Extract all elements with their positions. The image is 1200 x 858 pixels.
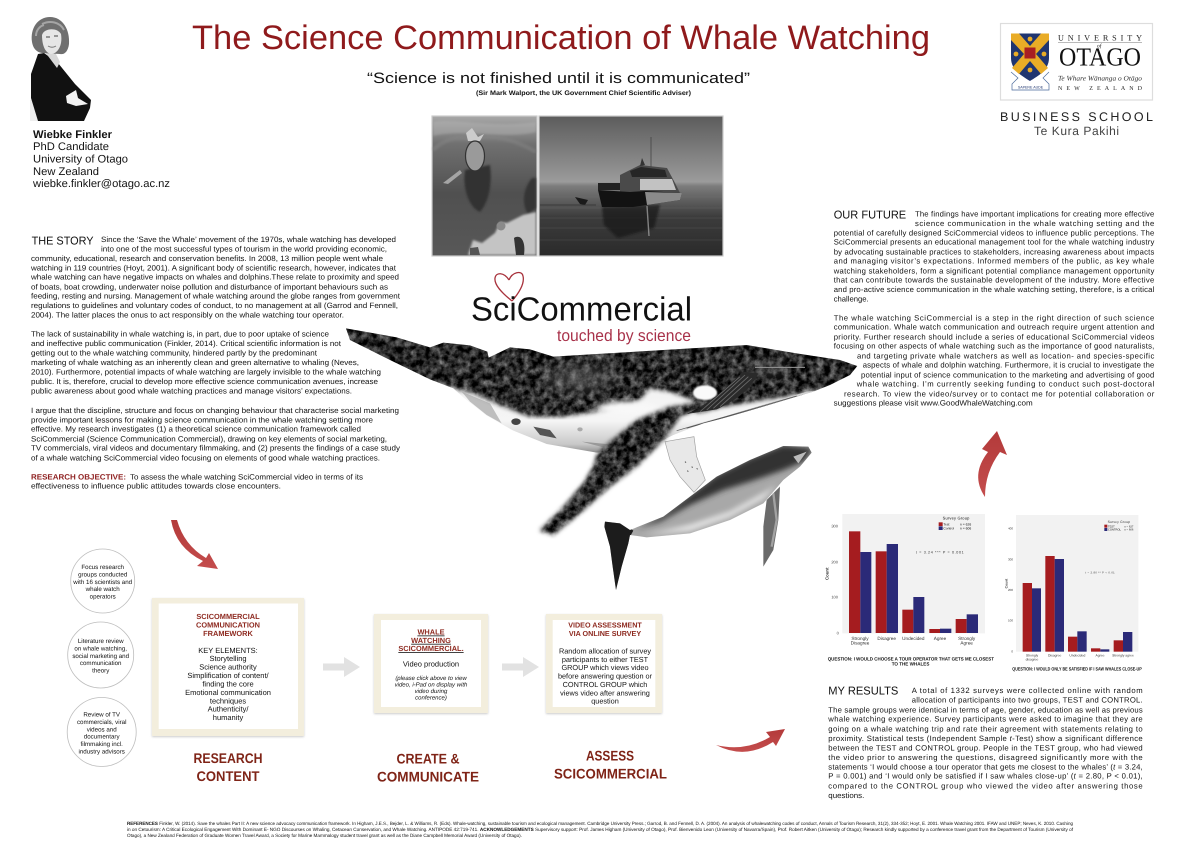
section: my results: compared to the CONTROL group who viewed the video after answering those [828,781,1143,790]
box: video assessment: GROUP which views video [561,663,649,672]
circle: focus groups: groups conducted [78,572,128,578]
section: our future: The findings have important implications for creating more effective [915,209,1154,218]
section: our future: suggestions please visit www.GoodWhaleWatching.com [834,399,1033,408]
box: framework: Emotional communication [185,688,271,697]
section: our future [833,209,1155,408]
section: the story: 2004). The latter places the onus to act responsibly on the whale watching tour operator. [31,311,344,320]
circle: commercials review: Review of TV [83,712,121,719]
section: our future: potential input of science communication to the marketing and advertising of good [861,370,1154,379]
label: assess scicommercial: ASSESS [586,748,634,764]
box: framework: finding the core [202,679,254,688]
box: video assessment: CONTROL GROUP which [563,680,647,689]
section: the story: SciCommercial (Science Communication Commercial), drawing on key elements of social marketing, [31,434,387,443]
arrow: objective to framework [171,520,218,569]
legend: Test [943,523,950,526]
circle: commercials review: industry advisors [78,748,125,755]
circle: literature review: theory [92,668,110,674]
legend: TEST [1108,525,1115,528]
section: the story: public. It is, therefore, crucial to develop more effective science communication avenues, increase [31,377,378,386]
bar chart: satisfied close-up: Strongly agree [1112,654,1134,658]
section: the story: into one of the most successful types of tourism in the world providing economic, [101,244,387,253]
label: research content: RESEARCH [194,750,262,766]
section: our future: that can contribute towards the sustainable development of the industry. More effective [834,276,1154,285]
University of Otago logo: of [1097,44,1103,50]
University of Otago logo: NEW ZEALAND [1058,86,1143,92]
section: the story: Since the ‘Save the Whale’ movement of the 1970s, whale watching has developed [101,235,396,244]
University of Otago logo: Te Whare Wānanga o Otāgo [1058,74,1143,82]
box: video assessment: before answering question or [558,672,653,680]
author details: New Zealand [33,166,99,178]
circle: literature review: communication [80,660,122,667]
section: the story: regulations to guidelines and voluntary codes of conduct, to no management at all (Garrod and Fennell, [31,301,398,310]
section: our future: priority. Further research should include a series of educational SciCommercial videos [834,332,1154,341]
heart icon [495,273,523,301]
bar chart: satisfied close-up: Disagree [1048,654,1061,658]
section: the story: marketing of whale watching as an inherently clean and green alternative to whaling (Neves, [31,358,359,367]
legend: Control [943,527,954,531]
section: my results: going on a whale watching trip and rate their agreement with statements relating to [828,724,1143,733]
section: our future: potential of carefully designed SciCommercial videos to influence public perceptions. The [834,228,1154,237]
bar chart: closest to whales: Undecided [902,636,924,641]
section: our future: challenge. [834,295,869,304]
whale dark back [340,323,863,417]
illustration: humpback whale and calf [340,323,863,593]
business school label [1000,110,1153,138]
legend: n = 626 [960,523,971,526]
legend: Survey Group [1108,520,1130,524]
bar chart: closest to whales: 0 [837,631,839,635]
bar chart: satisfied close-up: 400 [1008,527,1013,530]
circle: literature review [68,622,134,688]
section: the story: I argue that the discipline, structure and focus on changing behaviour that characterise social marketing [31,406,399,415]
references and acknowledgements: in on Cetourism: A Critical Ecological Engagement With Dominant E- NGO Discourses on Whaling, Cetacean Conservation, and Whale Watching. ANTIPODE 42:719-741. ACKNOWLEDGEMENTS Supervisory support: Prof. James Higham (University of Otago), Prof. Bienvenido Leon (University of Navarra/Spain), Prof. Robert Aitken (University of Otago); Research kindly supported by a conference travel grant from the Department of Tourism (University of [127,827,1074,832]
label: create and communicate: CREATE & [396,750,460,766]
author details [32,129,170,190]
heading: my results: MY RESULTS [828,686,899,698]
references and acknowledgements [127,821,1074,838]
heading: our future: OUR FUTURE [834,210,907,222]
circle: literature review: social marketing and [72,653,130,660]
bar chart: closest to whales: t = 3.24 *** P = 0.001 [916,550,964,554]
whale body [340,323,863,453]
chart caption 2: QUESTION: I WOULD ONLY BE SATISFIED IF I SAW WHALES CLOSE-UP [1012,666,1142,672]
label: create and communicate: COMMUNICATE [377,768,479,784]
label: create and communicate [377,750,479,784]
circle: focus groups [71,549,135,613]
section: my results: questions. [828,791,864,800]
SciCommercial logo: touched by science [557,327,691,345]
University of Otago logo [1000,24,1152,100]
legend: Survey Group [943,516,969,520]
legend [1104,520,1133,531]
section: the story: The lack of sustainability in whale watching is, in part, due to poor uptake of science [31,330,329,339]
box: whale watching scicommercial [374,614,488,714]
arrow: research to create [323,657,360,677]
bar chart: closest to whales: 300 [831,524,838,529]
circle: focus groups: Focus research [81,564,125,571]
section: the story: effective. My research investigates (1) a theoretical science communication framework called [31,425,361,434]
section: my results: statements ‘I would choose a tour operator that gets me closest to the whales’ (t = 3.24, [828,762,1143,771]
section: the story: provide important lessons for making science communication in the whale watching setting more [31,415,373,424]
bar chart: closest to whales: Agree [960,640,973,646]
box: video assessment: participants to either TEST [562,655,649,664]
bar chart: satisfied close-up: 0 [1011,650,1013,653]
box: framework: Authenticity/ [208,705,249,714]
section: the story [30,235,401,491]
bar chart: closest to whales [825,514,985,646]
title: The Science Communication of Whale Watching [192,19,930,57]
label: research content [194,750,262,784]
box: whale watching scicommercial: video, i-Pad on display with [395,681,468,688]
box: video assessment: views video after answering [560,688,650,697]
bar chart: closest to whales: 100 [831,595,838,600]
section: my results: proximity. Statistical tests (Independent Sample t-Test) show a significant difference [828,734,1143,743]
section: my results: The sample groups were identical in terms of age, gender, education as well as previous [828,706,1143,715]
section: the story: of boats, boat crowding, underwater noise pollution and disturbance of important behaviours such as [31,282,388,291]
bar chart: satisfied close-up: 100 [1008,619,1013,622]
section: our future: research. To view the video/survey or to contact me for potential collaboration or [844,389,1155,398]
section: our future: by advocating sustainable practices to stakeholders, increasing awareness about impacts [834,247,1154,256]
section: the story: of a whale watching SciCommercial video focusing on elements of good whale watching practices. [31,453,380,462]
box: video assessment [546,614,662,714]
section: the story: getting out to the whale watching community, hindered partly by the predominant [31,349,318,358]
bar chart: satisfied close-up: Undecided [1069,654,1085,658]
research objective: RESEARCH OBJECTIVE: [31,472,126,481]
section: our future: and targeting private whale watchers as well as location- and species-specific [857,351,1154,360]
section: my results [827,686,1143,800]
calf [600,443,817,593]
box: framework: SCICOMMERCIAL [196,612,260,621]
references and acknowledgements: Otago), a New Zealand Federation of Graduate Women Travel Award, a Society for Marine Mammalogy student travel grant as well as the Diane Campbell Memorial Award (University of Otago). [127,833,522,838]
legend: n = 606 [960,527,971,531]
bar chart: closest to whales: 200 [831,560,838,564]
whale rear flipper [665,437,705,492]
section: my results: between the TEST and CONTROL group. People in the TEST group, who had viewed [828,743,1143,752]
section: our future: focusing on other aspects of whale watching such as the importance of good naturalists, [834,342,1154,351]
section: my results: allocation of participants into two groups, TEST and CONTROL. [912,696,1143,705]
bar chart: satisfied close-up: Count [1005,578,1008,588]
bar chart: satisfied close-up: t = 2.80 ** P < 0.01 [1085,571,1115,574]
arrow: to my results [716,729,785,752]
box: framework: FRAMEWORK [203,629,253,638]
circle: focus groups: whale watch [85,586,120,593]
bar chart: satisfied close-up: Strongly [1026,654,1038,658]
box: framework: Storytelling [209,654,247,663]
section: our future: SciCommercial presents an educational management tool for the whale watching industry [834,238,1154,247]
section: the story: and ineffective public communication (Finkler, 2014). Critical scientific information is not [31,339,342,348]
box: whale watching scicommercial: video during [415,688,448,695]
arrow: create to assess [502,657,539,677]
chart caption 1: TO THE WHALES [892,662,929,666]
section: my results: P = 0.001) and ‘I would only be satisfied if I saw whales close-up’ (t = 2.80, P < 0.01), [828,772,1143,781]
section: our future: aspects of whale and dolphin watching. Furthermore, it is crucial to investigate the [863,361,1154,370]
author details: PhD Candidate [33,141,109,153]
box: video assessment: Random allocation of survey [559,646,651,656]
author details: wiebke.finkler@otago.ac.nz [32,178,170,190]
shield crest [1011,34,1049,90]
University of Otago logo: UNIVERSITY [1058,34,1142,42]
box: framework [152,598,304,737]
University of Otago logo: OTAGO [1059,42,1141,72]
legend: CONTROL [1108,528,1121,531]
bar chart: closest to whales: Strongly [851,636,869,641]
bar chart: closest to whales: Disagree [877,636,896,641]
legend: n = 627 [1124,525,1133,528]
quote: “Science is not finished until it is communicated” [367,70,750,87]
bar chart: closest to whales: Disagree [851,640,869,646]
label: assess scicommercial [554,748,667,782]
box: video assessment: VIDEO ASSESSMENT [568,621,642,630]
box: framework: COMMUNICATION [196,620,260,630]
bar chart: closest to whales: Count [825,567,830,580]
circle: commercials review: videos and [87,726,117,733]
section: our future: The whale watching SciCommercial is a step in the right direction of such science [834,313,1154,322]
business school label: BUSINESS SCHOOL [1000,110,1153,124]
legend [939,516,971,531]
circle: literature review: on whale watching, [74,646,127,652]
section: our future: watching stakeholders, form a significant potential compliance management opportunity [833,266,1154,275]
quote attribution: (Sir Mark Walport, the UK Government Chief Scientific Adviser) [476,90,691,97]
arrow: up to our future [978,431,1007,497]
section: the story: whale watching can have negative impacts on whales and dolphins.These relate to proximity and speed [30,273,399,282]
bar chart: satisfied close-up: 300 [1008,558,1013,561]
section: our future: communication. Whale watch communication and outreach require urgent attention and [834,323,1154,332]
box: framework: KEY ELEMENTS: [198,646,258,655]
chart caption 1 [828,656,994,666]
references and acknowledgements: REFERENCES Finkler, W. (2014). Save the whales Part II: A new science advocacy communication framework. In Higham, J.E.S., Bejder, L. & Williams, R. (Eds). Whale-watching, sustainable tourism and ecological management. Cambridge University Press.; Garrod, B. and Fennell, D. A. (2004). An analysis of whalewatching codes of conduct, Annals of Tourism Research, 31(2), 334-352; Hoyt, E. 2001. Whale Watching 2001. IFAW and UNEP; Neves, K. 2010. Cashing [127,821,1073,826]
section: the story: public awareness about good whale watching practices and manage visitors’ expectations. [31,387,352,396]
box: framework: Simplification of content/ [187,671,270,680]
circle: focus groups: with 16 scientists and [72,579,133,586]
bar chart: closest to whales: Agree [934,636,946,641]
bar chart: satisfied close-up: Agree [1096,654,1105,658]
circle: commercials review: documentary [84,734,120,741]
circle: commercials review: commercials, viral [77,719,126,726]
circle: literature review: Literature review [78,638,124,645]
business school label: Te Kura Pakihi [1034,124,1119,138]
research objective: To assess the whale watching SciCommercial video in terms of its [130,472,363,481]
section: our future: and managing visitor’s expectations. Informed members of the public, as key whale [834,257,1154,266]
section: my results: the video prior to answering the questions, disagreed significantly more with the [828,753,1143,762]
box: whale watching scicommercial: Video production [403,660,459,668]
circle: focus groups: operators [90,594,116,600]
box: framework: Science authority [199,662,257,672]
section: the story: 2010). Furthermore, potential impacts of whale watching are largely invisible to the whale watching [31,368,381,377]
bar chart: closest to whales: Strongly [958,636,975,641]
circle: commercials review [67,698,136,766]
box: whale watching scicommercial: WATCHING [411,636,451,645]
research objective: effectiveness to influence public attitudes towards close encounters. [31,482,281,491]
section: the story: community, educational, research and conservation benefits. In 2008, 13 million people went whale [31,254,383,263]
section: our future: science communication in the whale watching setting and the [915,219,1154,228]
bar chart: satisfied close-up [1005,515,1138,661]
box: whale watching scicommercial: (please click above to view [395,675,467,682]
box: whale watching scicommercial: SCICOMMERCIAL. [398,644,464,653]
section: my results: whale watching experience. Survey participants were asked to imagine that they are [827,715,1143,724]
research objective [31,472,363,491]
section: our future: and pro-active science communication in the whale watching setting, therefore, is a critical [834,285,1155,294]
section: my results: A total of 1332 surveys were collected online with random [912,686,1143,695]
section: our future: whale watching. I’m currently seeking funding to conduct such post-doctoral [856,380,1155,389]
portrait photo [30,17,91,121]
chart caption 1: QUESTION: I WOULD CHOOSE A TOUR OPERATOR THAT GETS ME CLOSEST [828,656,994,662]
section: the story: watching in 119 countries (Hoyt, 2001). A significant body of scientific research, however, indicates that [30,263,397,272]
photo: whale from above [432,116,537,256]
box: whale watching scicommercial: WHALE [417,628,445,636]
circle: commercials review: filmmaking incl. [81,741,123,748]
box: video assessment: VIA ONLINE SURVEY [569,629,641,638]
whale front flipper [539,403,704,535]
bar chart: satisfied close-up: disagree [1026,658,1039,661]
author details: University of Otago [33,154,128,166]
author details: Wiebke Finkler [33,129,113,141]
box: framework: humanity [213,713,243,722]
box: video assessment: question [591,697,619,706]
bar chart: satisfied close-up: 200 [1008,588,1013,592]
label: research content: CONTENT [196,768,260,784]
heading: the story: THE STORY [32,236,94,248]
section: the story: feeding, resting and nursing. Management of whale watching around the globe ranges from government [31,292,401,301]
label: assess scicommercial: SCICOMMERCIAL [554,766,667,782]
legend: n = 606 [1124,528,1133,531]
SciCommercial logo: SciCommercial [471,292,692,329]
box: framework: techniques [210,696,246,705]
box: whale watching scicommercial: conference) [415,695,447,702]
photo: whale watching boat [539,116,723,256]
section: the story: TV commercials, viral videos and documentary filmmaking, and (2) presents the findings of a case study [31,444,400,453]
shield crest: SAPERE AUDE [1018,86,1044,90]
SciCommercial logo [471,273,692,345]
